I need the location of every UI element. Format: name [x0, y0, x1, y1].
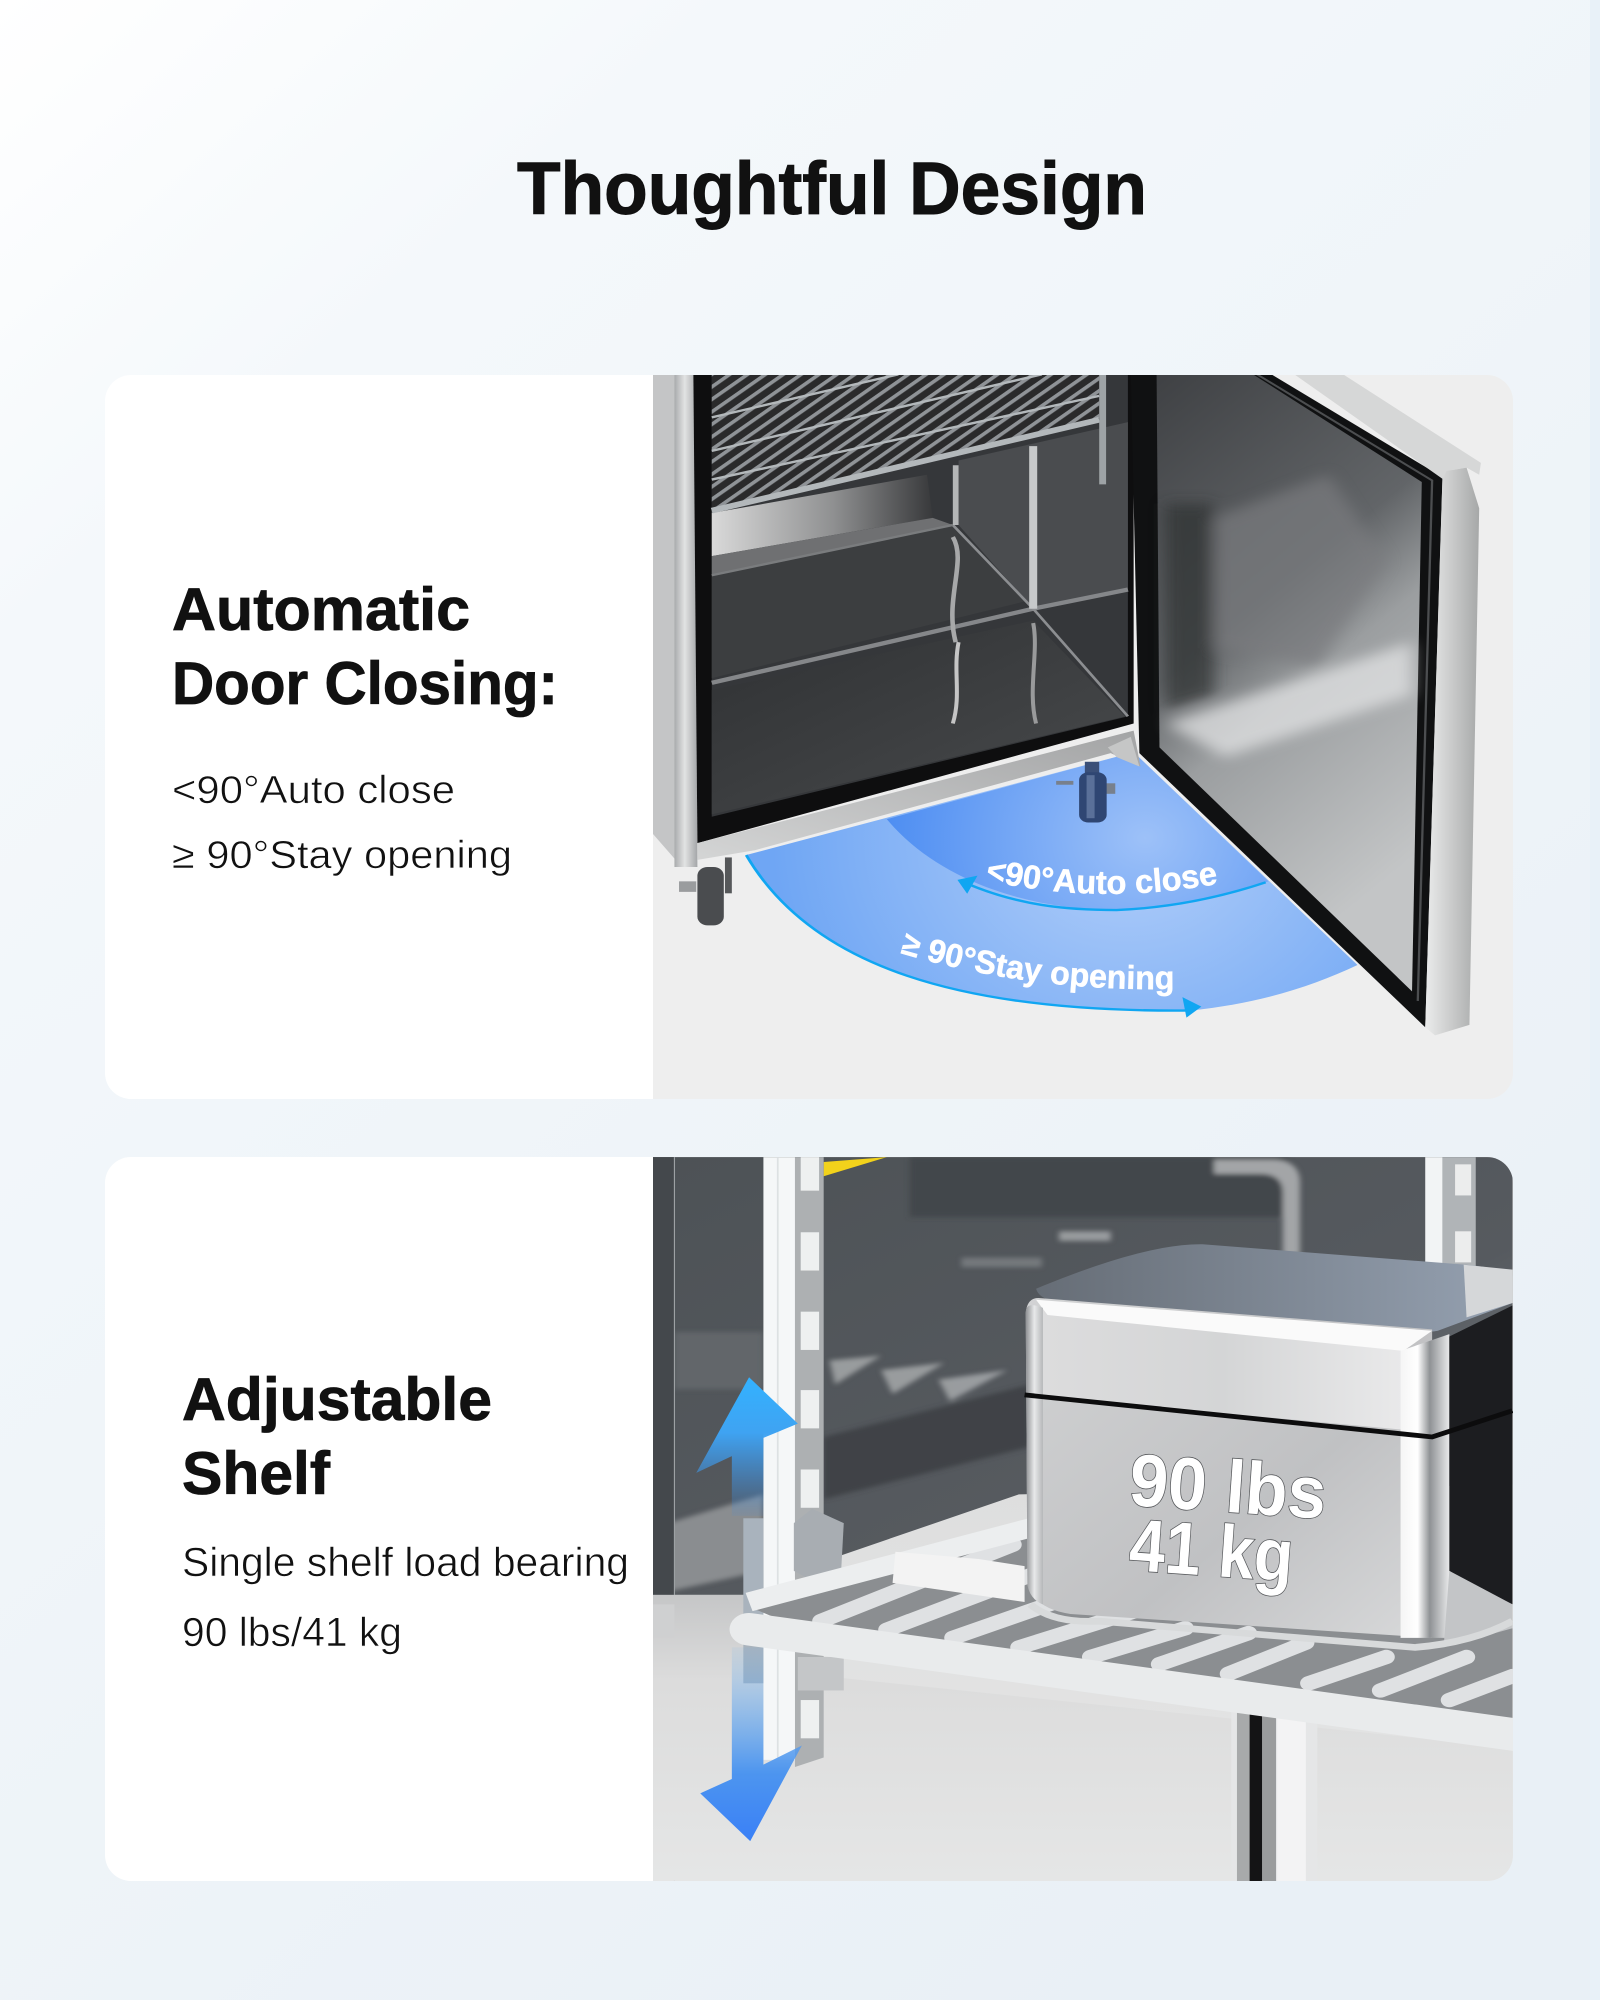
bottom sill: [697, 731, 1141, 860]
cabinet side and front frame: [653, 374, 697, 867]
panel: adjustable shelf: [105, 1157, 1524, 1882]
arc label: stay opening: ≥ 90°Stay opening: [900, 932, 1172, 996]
weight label: 41 kg: [1127, 1503, 1296, 1597]
wire shelf: [712, 374, 1106, 513]
title: Thoughtful Design: [517, 147, 1147, 230]
center post: [1232, 1712, 1317, 1881]
left rail: [743, 1157, 844, 1767]
text card: adjustable shelf: [105, 1157, 653, 1881]
weight label: [1127, 1438, 1329, 1597]
arc label: auto close: [988, 862, 1216, 894]
illustration: open refrigerator door: [653, 375, 1513, 1099]
weight label: 90 lbs: [1127, 1438, 1329, 1535]
interior floor and shelf ledges: [712, 446, 1128, 814]
right rail: [1425, 1157, 1476, 1272]
arrow: up: [696, 1377, 798, 1516]
illustration: shelf with weight: [653, 1157, 1524, 1882]
arrow: down: [700, 1647, 802, 1841]
heading: adjustable shelf: [182, 1366, 492, 1507]
lower compartment: [653, 1157, 886, 1880]
arc label: auto close: <90°Auto close: [988, 862, 1216, 894]
description: door closing behaviour: <90°Auto close: [172, 769, 455, 812]
heading: automatic door closing: Door Closing:: [172, 650, 558, 717]
interior back wall: [712, 374, 1128, 817]
cabinet opening: [693, 374, 1134, 843]
inner arc: auto close zone: [887, 752, 1269, 910]
heading: automatic door closing: Automatic: [172, 576, 470, 643]
description: load bearing: Single shelf load bearing: [182, 1539, 629, 1585]
interior wall: [653, 1157, 1512, 1880]
weight block: [1025, 1244, 1512, 1647]
heading: adjustable shelf: Shelf: [182, 1440, 331, 1507]
description: load bearing: 90 lbs/41 kg: [182, 1609, 402, 1655]
wire rack: [749, 1528, 1512, 1719]
caster: rear wheel: [1056, 762, 1115, 823]
front tube: [749, 1629, 1524, 1736]
outer arc: stay opening zone: [746, 752, 1358, 1018]
heading: adjustable shelf: Adjustable: [182, 1366, 492, 1433]
heading: automatic door closing: [172, 576, 558, 717]
panel: automatic door closing: [105, 375, 1513, 1099]
description: door closing behaviour: ≥ 90°Stay opening: [172, 834, 512, 877]
caster: front wheel: [679, 857, 732, 925]
description: door closing behaviour: [172, 769, 512, 877]
door panel: [1131, 374, 1481, 1035]
text card: door closing: [105, 375, 653, 1099]
description: load bearing: [182, 1539, 629, 1655]
